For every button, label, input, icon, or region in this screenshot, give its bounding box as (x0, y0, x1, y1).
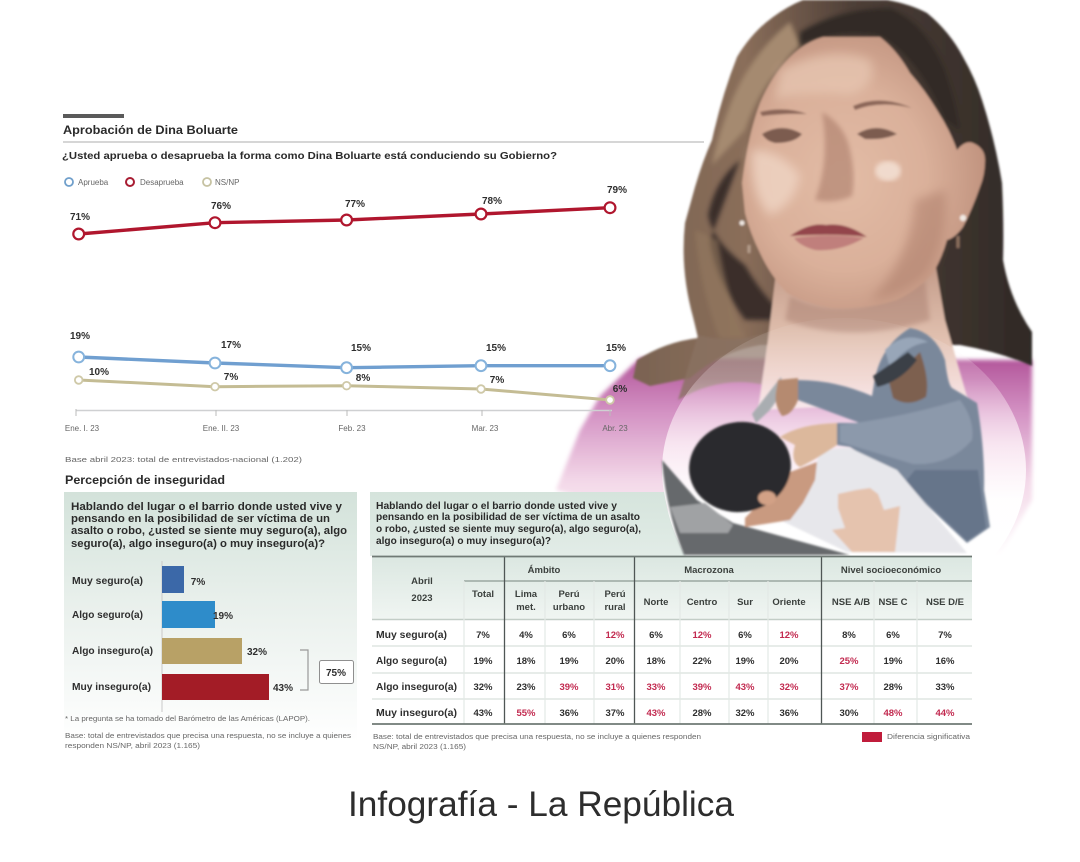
line chart: approval (65, 185, 628, 433)
value labels: 79% (607, 185, 627, 196)
table headers: Oriente (772, 597, 806, 608)
panel question: asalto o robo, ¿usted se siente muy seguro(a), algo (71, 525, 348, 537)
legend: NS/NP (215, 178, 239, 187)
series: Desaprueba (73, 202, 615, 239)
row: Algo seguro: 20% (605, 656, 625, 667)
value labels: 6% (613, 384, 627, 395)
bar labels: Algo inseguro(a) (72, 646, 153, 657)
axis labels: Mar. 23 (472, 424, 499, 433)
table headers: Norte (644, 597, 668, 608)
jaw shadow (870, 190, 946, 300)
hair: fading lock behind the circle (678, 330, 775, 400)
row: Muy inseguro: 36% (559, 708, 579, 719)
value labels: 7% (490, 375, 504, 386)
legend (65, 178, 239, 187)
gun (752, 377, 784, 423)
nose shadow (815, 112, 854, 201)
series: NS/NP (75, 376, 614, 404)
row: Muy seguro: Muy seguro(a) (376, 630, 447, 641)
bars (162, 566, 269, 700)
panel footnotes: * La pregunta se ha tomado del Barómetro de las Américas (LAPOP). (65, 714, 310, 723)
robber silhouette (798, 328, 990, 543)
gun hand (776, 378, 798, 416)
row: Muy inseguro: 32% (735, 708, 755, 719)
row: Muy inseguro: 28% (692, 708, 712, 719)
axis labels: Abr. 23 (602, 424, 628, 433)
divider (63, 141, 704, 143)
table footnote (373, 732, 701, 751)
victim face and neck (745, 462, 817, 527)
table headers: 2023 (411, 593, 433, 604)
row: Muy seguro: 8% (842, 630, 856, 641)
table headers: Ámbito (528, 565, 561, 576)
row: Muy seguro: 7% (938, 630, 952, 641)
table header background (372, 556, 972, 619)
row: Muy inseguro: 43% (473, 708, 493, 719)
row: Algo seguro: 25% (839, 656, 859, 667)
row: Algo seguro (376, 656, 955, 667)
table footnote: Base: total de entrevistados que precisa una respuesta, no se incluye a quienes responden (373, 732, 701, 741)
row: Muy seguro: 12% (605, 630, 625, 641)
row: Muy inseguro: 37% (605, 708, 625, 719)
panel footnotes: responden NS/NP, abril 2023 (1.165) (65, 741, 200, 750)
earrings (960, 215, 966, 221)
base note: approval: Base abril 2023: total de entrevistados-nacional (1.202) (65, 455, 302, 464)
portrait of Dina Boluarte (633, 0, 1032, 410)
panel footnotes: Base: total de entrevistados que precisa una respuesta, no se incluye a quienes (65, 731, 351, 740)
title: approval: Aprobación de Dina Boluarte (63, 125, 238, 137)
table headers: NSE C (878, 597, 908, 608)
value labels: 78% (482, 196, 502, 207)
value labels: 77% (345, 199, 365, 210)
neck fade shadow under chin (785, 280, 930, 332)
panel question (71, 501, 348, 550)
panel question: pensando en la posibilidad de ser víctima de un (71, 513, 330, 525)
row: Muy inseguro: 44% (935, 708, 955, 719)
value labels (70, 185, 627, 395)
value labels: 15% (606, 343, 626, 354)
pale circle behind the robbery scene (662, 318, 1026, 622)
row: Algo seguro: Algo seguro(a) (376, 656, 447, 667)
value labels: 15% (351, 343, 371, 354)
row: Algo inseguro (376, 682, 955, 693)
question: table: Hablando del lugar o el barrio donde usted vive y (376, 501, 617, 512)
car panel (670, 503, 733, 533)
value labels: 8% (356, 373, 370, 384)
row: Algo seguro: 22% (692, 656, 712, 667)
bar labels: Algo seguro(a) (72, 610, 143, 621)
row: Muy seguro: 12% (692, 630, 712, 641)
hair: light strands on the left (712, 22, 800, 165)
row: Muy seguro: 4% (519, 630, 533, 641)
row: Algo inseguro: 39% (692, 682, 712, 693)
row: Algo seguro: 19% (883, 656, 903, 667)
row: Algo inseguro: 39% (559, 682, 579, 693)
table headers: NSE A/B (832, 597, 870, 608)
row: Algo inseguro: 23% (516, 682, 536, 693)
row: Muy seguro: 6% (738, 630, 752, 641)
row: Muy seguro: 6% (562, 630, 576, 641)
row: Algo seguro: 19% (559, 656, 579, 667)
table headers: Perú (558, 589, 580, 600)
question: table (376, 501, 641, 547)
row rules (372, 646, 972, 699)
bar values (191, 577, 293, 694)
axis line (161, 561, 163, 712)
robber hand on neck (780, 423, 837, 467)
heading: insecurity: Percepción de inseguridad (65, 473, 225, 487)
row: Algo inseguro: 33% (646, 682, 666, 693)
axis labels: Ene. II. 23 (203, 424, 240, 433)
question: table: pensando en la posibilidad de ser víctima de un asalto (376, 512, 640, 523)
value labels: 10% (89, 367, 109, 378)
row: Algo seguro: 18% (646, 656, 666, 667)
question: table: o robo, ¿usted se siente muy seguro(a), algo seguro(a), (376, 524, 641, 535)
row: Muy seguro: 6% (649, 630, 663, 641)
table headers: met. (516, 602, 536, 613)
robber sleeve highlight (840, 400, 972, 464)
row: Algo seguro: 18% (516, 656, 536, 667)
robber lower body shadow (905, 470, 986, 541)
row: Algo inseguro: 28% (883, 682, 903, 693)
victim raised hand (832, 488, 900, 552)
value labels: 7% (224, 372, 238, 383)
row: Muy inseguro: 48% (883, 708, 903, 719)
total callout: 75% (326, 668, 346, 679)
bar values: 32% (247, 647, 267, 658)
table headers: Nivel socioeconómico (841, 565, 941, 576)
table headers: NSE D/E (926, 597, 964, 608)
bar values: 19% (213, 611, 233, 622)
bar values: 43% (273, 683, 293, 694)
legend: Aprueba (78, 178, 109, 187)
bar labels (72, 576, 153, 693)
question: approval: ¿Usted aprueba o desaprueba la forma como Dina Boluarte está conduciendo su Gobierno? (62, 151, 557, 162)
total callout (320, 660, 354, 684)
row: Algo seguro: 16% (935, 656, 955, 667)
row: Muy seguro (376, 630, 952, 641)
eyebrows (760, 100, 912, 116)
table headers: urbano (553, 602, 585, 613)
row: Algo inseguro: 32% (473, 682, 493, 693)
row: Muy seguro: 12% (779, 630, 799, 641)
row: Algo seguro: 19% (473, 656, 493, 667)
row: Muy seguro: 7% (476, 630, 490, 641)
illustration background: pink band (556, 358, 1032, 556)
table headers: Abril (411, 576, 433, 587)
axis labels: Feb. 23 (338, 424, 366, 433)
row: Algo inseguro: 31% (605, 682, 625, 693)
hair: dark top (800, 8, 960, 130)
panel question: Hablando del lugar o el barrio donde usted vive y (71, 501, 342, 513)
hair: dark shadow by the cheek (708, 160, 790, 320)
value labels: 19% (70, 331, 90, 342)
row: Muy inseguro: 43% (646, 708, 666, 719)
header bar (63, 114, 124, 118)
row: Muy inseguro: 55% (516, 708, 536, 719)
legend: significant difference: Diferencia significativa (887, 732, 970, 741)
hair (633, 0, 1032, 386)
lips (790, 224, 867, 237)
victim ear (758, 491, 776, 505)
row: Muy inseguro: Muy inseguro(a) (376, 708, 457, 719)
table headers (411, 565, 964, 613)
row: Algo seguro: 20% (779, 656, 799, 667)
row: Algo inseguro: 32% (779, 682, 799, 693)
bar labels: Muy inseguro(a) (72, 682, 151, 693)
row: Muy inseguro: 36% (779, 708, 799, 719)
column rules (464, 581, 917, 724)
panel: green question box, right (370, 492, 686, 556)
robbery scene illustration (662, 328, 990, 555)
sun patch (875, 161, 901, 181)
robber cap (873, 352, 917, 387)
row: Algo inseguro: 33% (935, 682, 955, 693)
eyes (762, 128, 897, 143)
neck (758, 262, 968, 410)
cheek highlights (752, 150, 800, 215)
hair: left lower lock (695, 230, 745, 338)
row: Algo inseguro: 37% (839, 682, 859, 693)
bracket (300, 650, 308, 690)
axis (76, 409, 612, 416)
row: Muy seguro: 6% (886, 630, 900, 641)
table headers: Perú (604, 589, 626, 600)
row: Muy inseguro (376, 708, 955, 719)
bar labels: Muy seguro(a) (72, 576, 143, 587)
value labels: 15% (486, 343, 506, 354)
victim head (683, 415, 797, 519)
table footnote: NS/NP, abril 2023 (1.165) (373, 742, 466, 751)
forehead highlight (775, 54, 872, 100)
series: Aprueba (73, 352, 615, 373)
table (372, 556, 972, 724)
legend: Desaprueba (140, 178, 184, 187)
table headers: Lima (515, 589, 538, 600)
victim shirt (780, 448, 967, 553)
car (662, 460, 850, 555)
robber hood highlight (885, 338, 928, 368)
axis labels (65, 424, 628, 433)
table headers: rural (604, 602, 626, 613)
value labels: 76% (211, 201, 231, 212)
panel question: seguro(a), algo inseguro(a) o muy inseguro(a)? (71, 538, 325, 550)
robber face (889, 352, 927, 403)
row: Muy inseguro: 30% (839, 708, 859, 719)
value labels: 71% (70, 212, 90, 223)
row: Algo inseguro: 43% (735, 682, 755, 693)
row: Algo seguro: 19% (735, 656, 755, 667)
value labels: 17% (221, 340, 241, 351)
caption: Infografía - La República (348, 785, 735, 824)
face (742, 37, 985, 308)
row: Algo inseguro: Algo inseguro(a) (376, 682, 457, 693)
table headers: Sur (737, 597, 753, 608)
table headers: Centro (687, 597, 717, 608)
panel: bar chart (64, 492, 357, 750)
bar values: 7% (191, 577, 205, 588)
table headers: Macrozona (684, 565, 735, 576)
table headers: Total (472, 589, 494, 600)
question: table: algo inseguro(a) o muy inseguro(a)? (376, 536, 551, 547)
axis labels: Ene. I. 23 (65, 424, 100, 433)
panel footnotes (65, 714, 351, 750)
legend: significant difference (862, 732, 970, 742)
